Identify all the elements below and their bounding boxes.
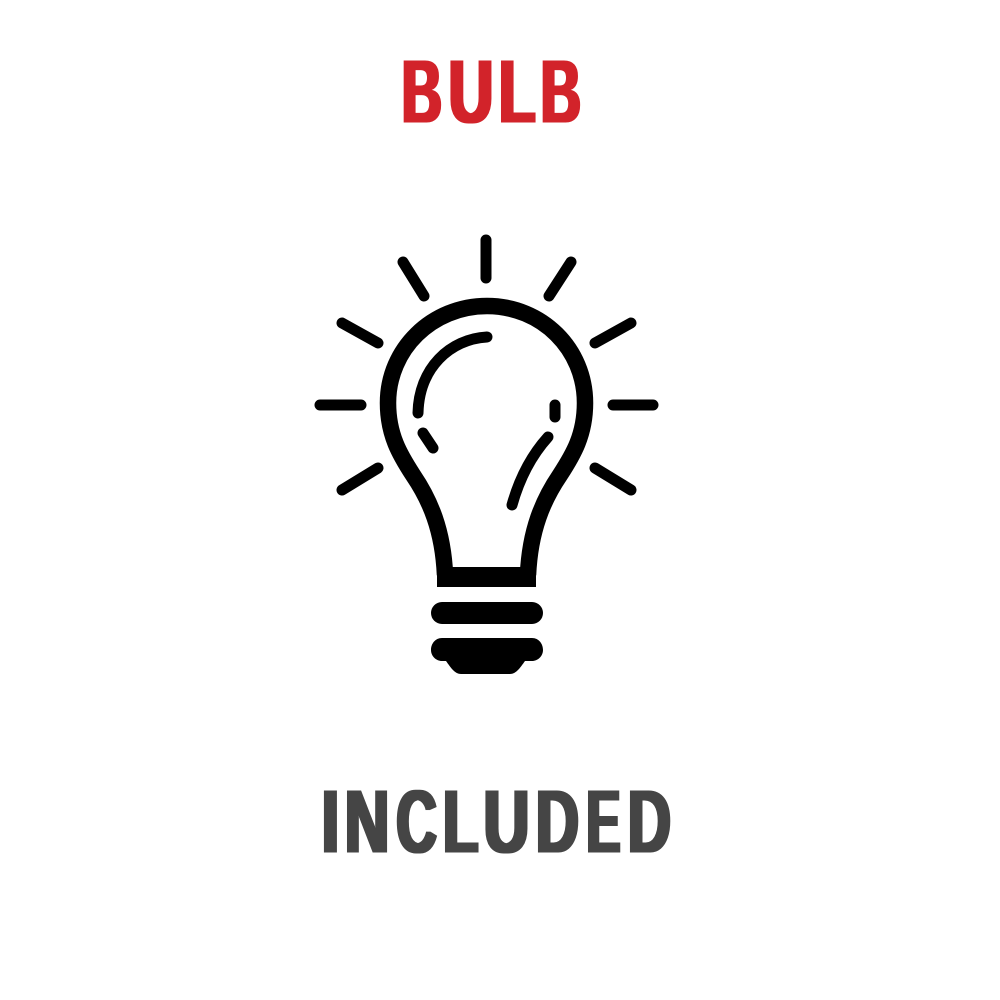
screw base lower ring and tip (431, 638, 543, 674)
rays (320, 240, 653, 490)
caption: D (536, 772, 579, 873)
caption: L (443, 773, 478, 873)
caption: I (322, 772, 339, 872)
glass highlights (418, 337, 555, 505)
title: U (449, 42, 493, 142)
title: L (499, 42, 535, 143)
title: B (402, 42, 442, 142)
title (402, 42, 581, 143)
screw base upper ring (431, 602, 543, 624)
caption: N (345, 772, 389, 872)
caption: E (587, 772, 620, 872)
caption: C (396, 771, 437, 872)
icon: light bulb (320, 240, 653, 674)
bulb neck (437, 567, 536, 587)
caption: D (628, 772, 671, 873)
caption (322, 771, 671, 873)
bulb glass outline (388, 306, 585, 575)
title: B (541, 42, 581, 142)
caption: U (484, 773, 529, 872)
